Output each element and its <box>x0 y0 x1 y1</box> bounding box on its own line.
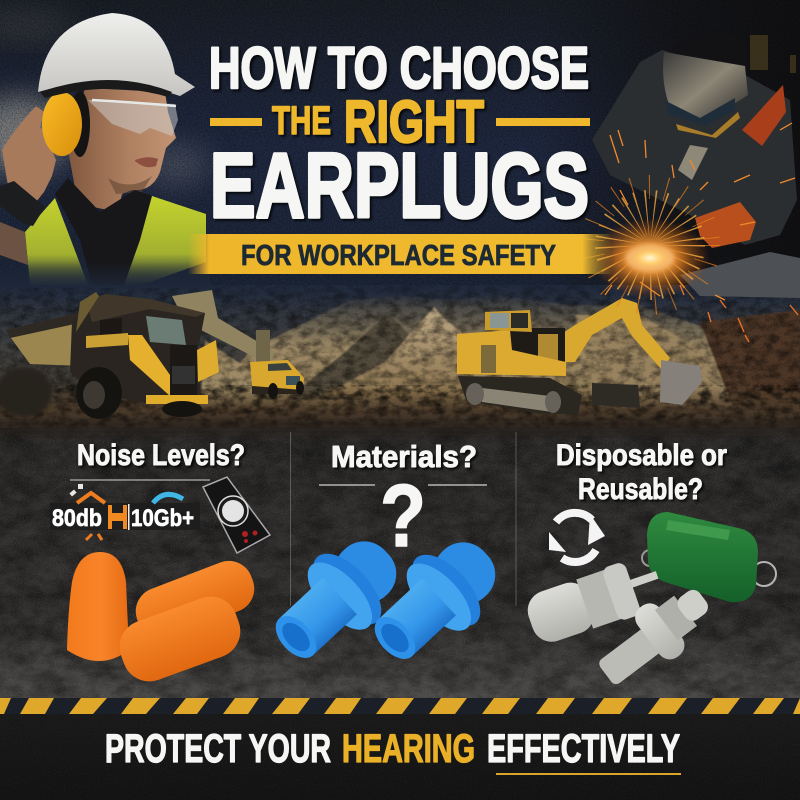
tracked excavator <box>457 298 702 415</box>
footer slogan <box>105 727 680 771</box>
spark glow over banner <box>610 236 690 280</box>
mining scene background <box>0 285 800 435</box>
earmuff <box>42 91 90 157</box>
wrist watch <box>0 181 45 226</box>
chest <box>678 145 708 180</box>
panel: materials <box>255 439 516 680</box>
heading: disposable or reusable: Reusable? <box>578 473 703 506</box>
footer slogan: EFFECTIVELY <box>487 727 680 771</box>
jacket <box>592 50 797 245</box>
spark burst <box>590 187 710 303</box>
blue earplug left <box>255 520 417 679</box>
dump truck <box>0 292 219 419</box>
man with hard hat and earmuffs <box>0 13 206 285</box>
title line: the right with rules <box>210 89 590 155</box>
heading: noise levels: Noise Levels? <box>77 439 245 472</box>
embers <box>605 123 795 300</box>
title line: the right with rules: THE <box>272 99 331 143</box>
background excavator arm <box>172 290 275 365</box>
welder with sparks <box>590 32 800 303</box>
orange foam earplugs <box>67 552 261 689</box>
green case with keyring <box>642 512 776 602</box>
small yellow truck <box>250 360 304 399</box>
lower fade over figure <box>0 262 210 288</box>
decibel graphic: 10Gb+ <box>131 505 194 532</box>
metal visor <box>663 52 748 122</box>
safety glasses <box>88 100 178 136</box>
lights in background <box>750 35 796 73</box>
footer slogan: HEARING <box>342 727 475 771</box>
blue earplug right <box>354 521 516 680</box>
yellow subtitle banner <box>188 234 612 274</box>
title line: earplugs: EARPLUGS <box>210 135 589 237</box>
hand and forearm <box>0 106 62 265</box>
background: stormy navy sky <box>0 0 800 300</box>
footer panel <box>0 714 800 800</box>
panel: noise levels <box>50 439 270 689</box>
icon: recycle arrows <box>549 513 605 562</box>
panel: disposable or reusable <box>522 439 776 698</box>
title <box>209 36 590 237</box>
question mark: ? <box>380 466 426 565</box>
rocky ground panel <box>0 422 800 700</box>
neck and face <box>68 88 176 212</box>
workbench rock <box>680 252 800 298</box>
orange glove <box>695 202 756 248</box>
scene embers top right <box>680 285 798 342</box>
visor band <box>664 98 735 126</box>
orange shoulder patch <box>742 85 786 146</box>
decibel graphic: 80db <box>52 505 102 532</box>
title line: how to choose: HOW TO CHOOSE <box>209 36 589 101</box>
footer slogan: PROTECT YOUR <box>105 727 331 771</box>
heading: disposable or reusable: Disposable or <box>556 439 727 472</box>
column dividers <box>290 432 516 606</box>
heading: disposable or reusable <box>556 439 727 506</box>
black hood <box>672 32 748 68</box>
meter tag <box>203 477 270 553</box>
hazard stripe band <box>0 698 800 714</box>
heading: materials: Materials? <box>331 439 477 474</box>
mountains <box>200 296 800 425</box>
gold goggles <box>676 112 740 138</box>
title line: the right with rules: RIGHT <box>344 89 484 155</box>
yellow subtitle banner: FOR WORKPLACE SAFETY <box>241 240 556 272</box>
clear reusable earplug left <box>522 552 668 649</box>
black shirt <box>55 178 152 285</box>
safety vest <box>25 196 206 285</box>
clear reusable earplug right <box>586 574 722 698</box>
white hard hat <box>38 13 195 98</box>
decibel graphic <box>50 484 200 540</box>
